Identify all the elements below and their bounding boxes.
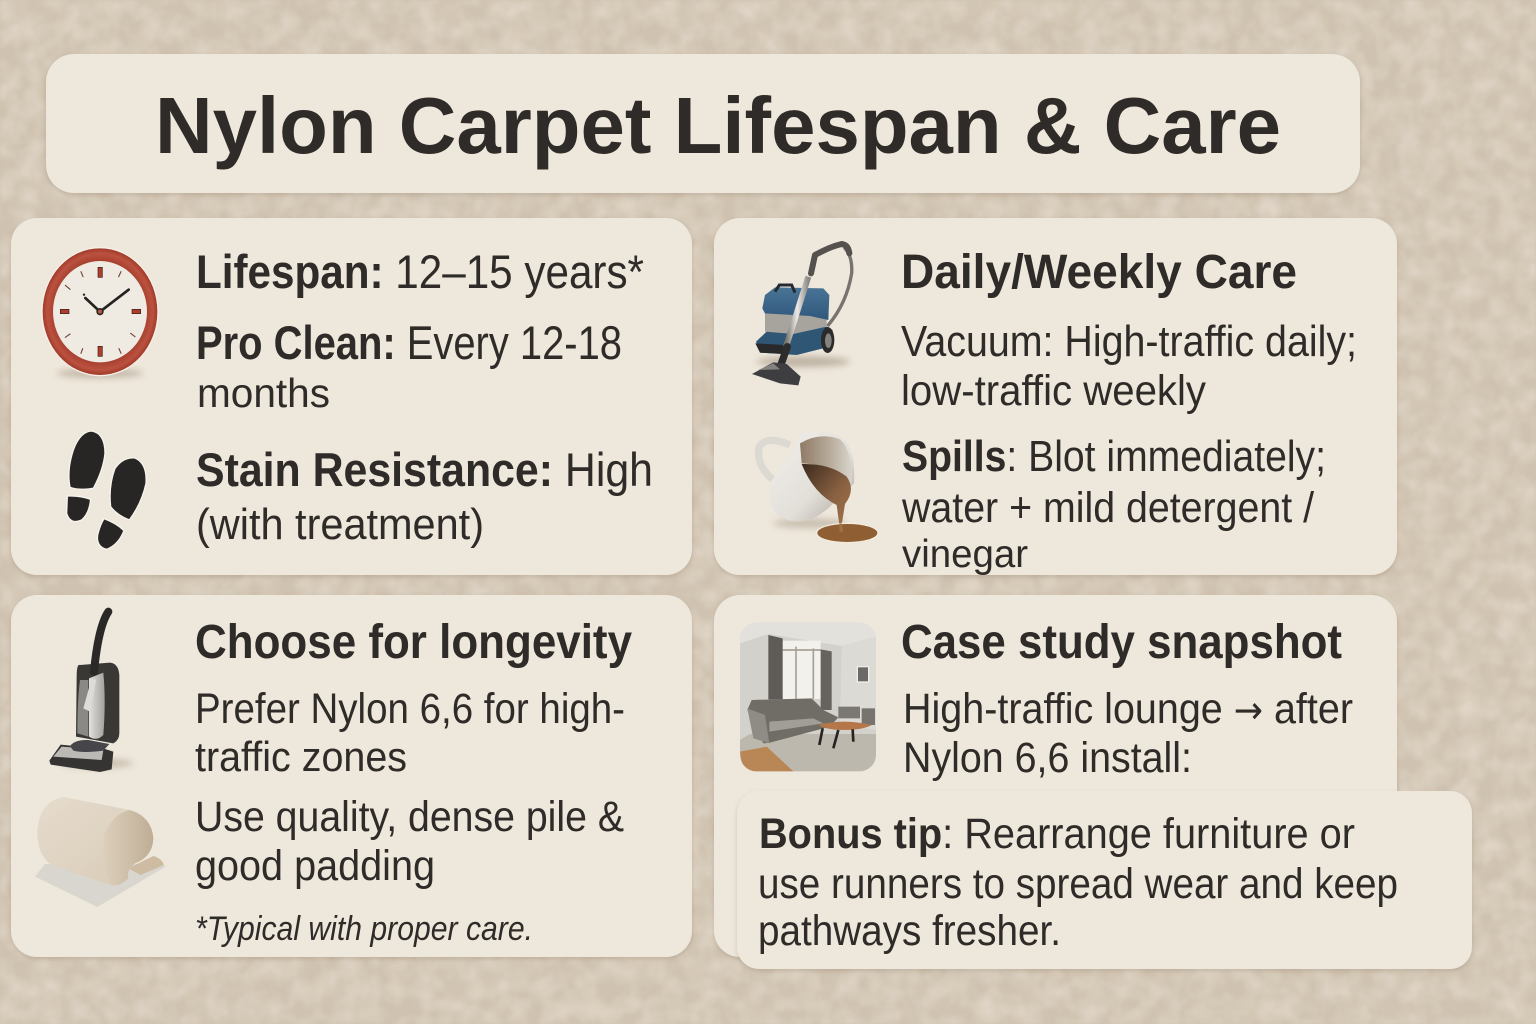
case study text: High-traffic lounge → after [903, 685, 1353, 733]
stain resistance text [196, 443, 653, 549]
stain resistance text: (with treatment) [196, 500, 484, 549]
icon: carpet padding roll [35, 797, 167, 907]
title banner [46, 54, 1360, 193]
callout: bonus tip: use runners to spread wear and keep [758, 860, 1398, 908]
icon: upright vacuum [49, 612, 133, 772]
pro clean text: Pro Clean: Every 12-18 [196, 316, 622, 369]
icon: footprints [67, 431, 146, 549]
nylon text [195, 685, 625, 780]
lifespan text: Lifespan: 12–15 years* [196, 245, 644, 298]
spills text: vinegar [902, 533, 1028, 576]
panel: daily weekly care [714, 218, 1397, 576]
icon: wall clock [41, 247, 159, 378]
callout: bonus tip: Bonus tip: Rearrange furniture or [759, 810, 1355, 858]
vacuum text: Vacuum: High-traffic daily; [901, 317, 1357, 366]
image: living room [740, 623, 876, 771]
spills text: Spills: Blot immediately; [902, 432, 1326, 481]
pro clean text: months [197, 370, 330, 416]
icon: spilled cup [759, 431, 879, 543]
nylon text: Prefer Nylon 6,6 for high- [195, 685, 625, 733]
vacuum text: low-traffic weekly [901, 367, 1206, 415]
callout: bonus tip: pathways fresher. [758, 907, 1061, 955]
stain resistance text: Stain Resistance: High [196, 443, 653, 496]
footnote: *Typical with proper care. [195, 910, 533, 948]
spills text [901, 432, 1326, 576]
callout: bonus tip [737, 791, 1472, 969]
spills text: water + mild detergent / [901, 484, 1314, 532]
panel: case study snapshot [714, 595, 1397, 957]
icon: canister vacuum [752, 244, 852, 385]
heading: case study: Case study snapshot [901, 616, 1342, 669]
pro clean text [196, 316, 622, 416]
panel: choose for longevity [11, 595, 692, 957]
title: Nylon Carpet Lifespan & Care [155, 81, 1281, 170]
padding text: Use quality, dense pile & [195, 793, 624, 841]
padding text: good padding [195, 842, 435, 890]
case study text [903, 685, 1353, 782]
padding text [195, 793, 624, 890]
heading: daily weekly care: Daily/Weekly Care [901, 246, 1297, 299]
vacuum text [901, 317, 1357, 415]
case study text: Nylon 6,6 install: [903, 734, 1192, 782]
nylon text: traffic zones [195, 733, 407, 780]
heading: choose for longevity: Choose for longevity [195, 616, 632, 669]
panel: lifespan [11, 218, 692, 575]
